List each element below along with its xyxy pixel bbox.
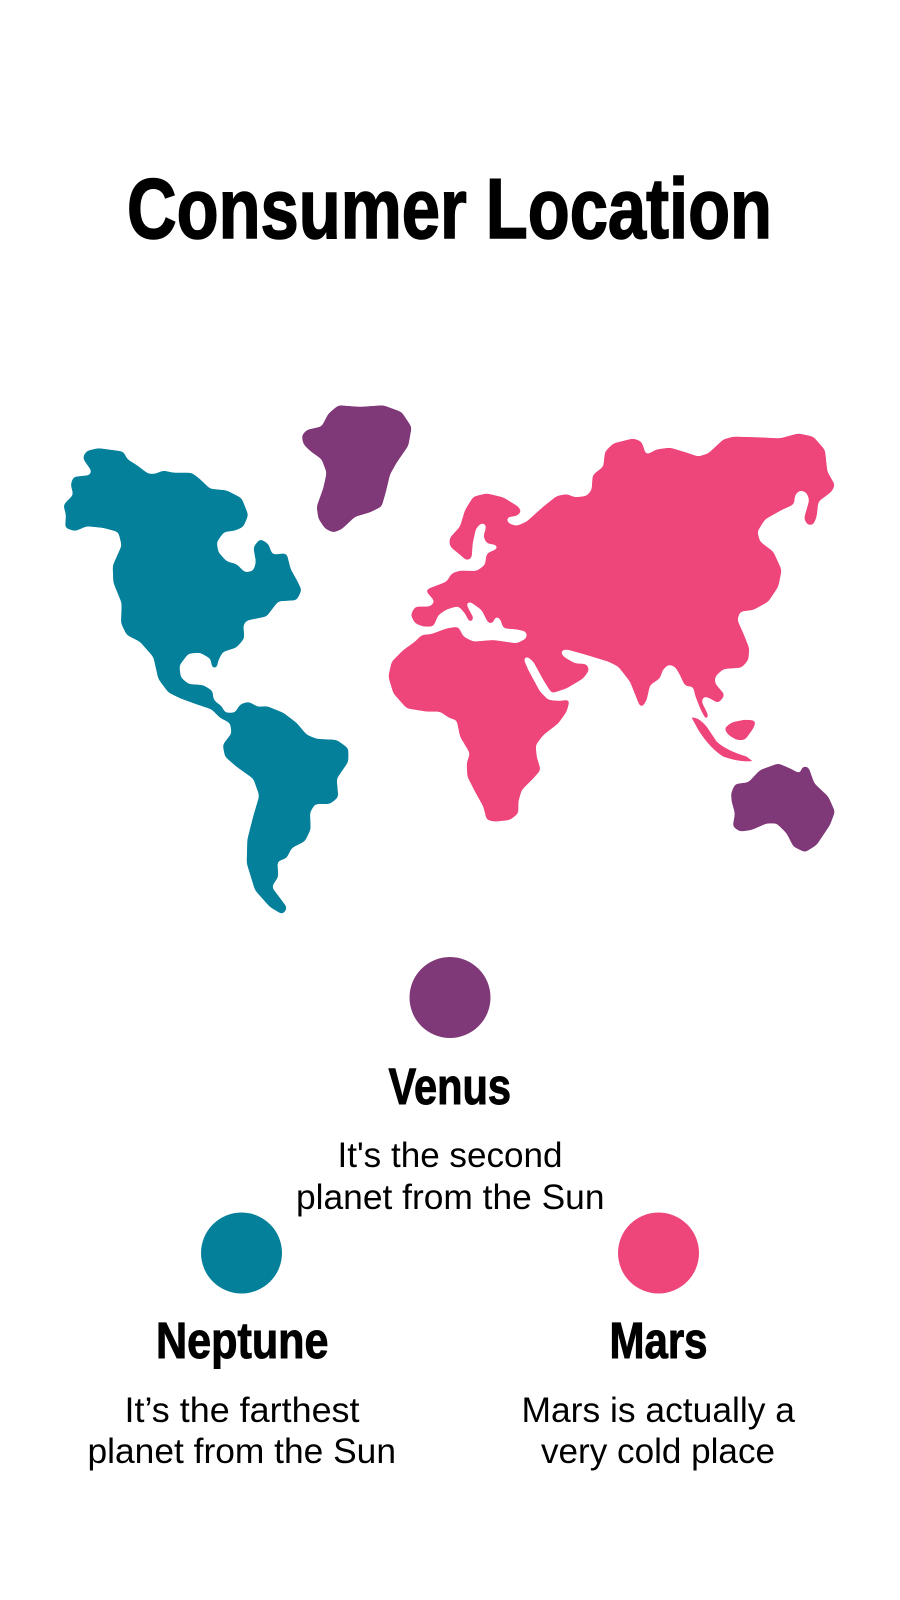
continent: Australia (731, 763, 835, 852)
islands: Sumatra and Java (692, 718, 752, 761)
text: Mars description (522, 1391, 796, 1471)
island: Borneo (724, 720, 756, 740)
heading: Neptune: Neptune (156, 1312, 328, 1369)
heading: Venus: Venus (388, 1058, 511, 1115)
icon: Neptune dot (201, 1212, 282, 1294)
text: Venus description: planet from the Sun (296, 1178, 604, 1217)
continent: Greenland (302, 405, 412, 533)
world map (63, 405, 835, 915)
continent: Americas (63, 448, 348, 915)
legend: Venus (296, 957, 604, 1217)
icon: Mars dot (618, 1212, 699, 1294)
heading: Mars: Mars (610, 1312, 708, 1369)
legend: Neptune (88, 1212, 396, 1471)
icon: Venus dot (410, 957, 490, 1038)
text: Venus description (296, 1136, 604, 1217)
text: Mars description: Mars is actually a (522, 1391, 796, 1430)
text: Mars description: very cold place (541, 1432, 775, 1471)
text: Neptune description: planet from the Sun (88, 1432, 396, 1471)
legend: Mars (522, 1212, 796, 1471)
text: Neptune description: It’s the farthest (124, 1391, 360, 1430)
continent: Eurasia and Africa (388, 433, 835, 822)
text: Neptune description (88, 1391, 396, 1471)
text: Venus description: It's the second (338, 1136, 562, 1175)
